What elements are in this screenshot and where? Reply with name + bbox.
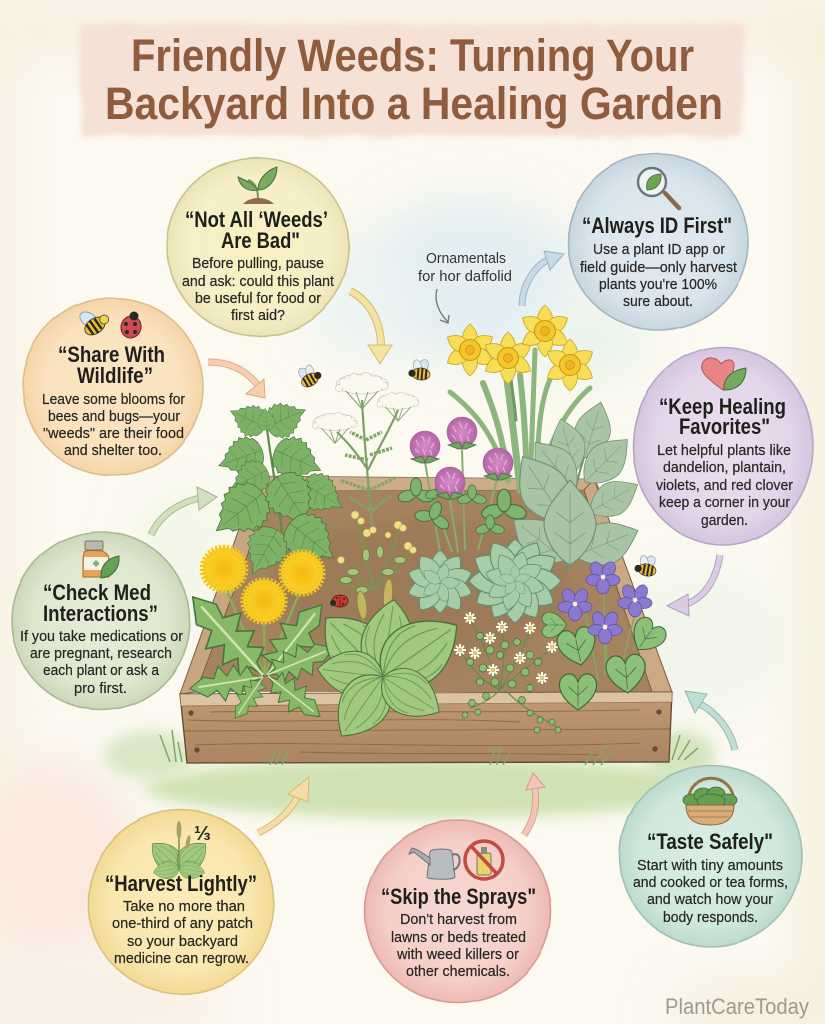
- panel: Check Med Interactions: pro first.: [74, 680, 127, 697]
- icon: plantain sprig: [144, 821, 214, 881]
- heading: “Taste Safely": [647, 829, 773, 854]
- panel: Taste Safely: and cooked or tea forms,: [633, 874, 788, 891]
- panel: Not All Weeds Are Bad: first aid?: [231, 307, 285, 324]
- panel: Check Med Interactions: Interactions”: [43, 601, 158, 626]
- panel: Not All Weeds Are Bad: be useful for food or: [195, 290, 321, 307]
- panel: Keep Healing Favorites: Favorites": [679, 414, 770, 439]
- watermark: PlantCareToday: [665, 994, 809, 1019]
- left rail: [180, 476, 272, 694]
- ornamentals annotation: Ornamentals: [426, 251, 506, 267]
- ladybug: [330, 595, 348, 607]
- daffodil flowers: [444, 324, 496, 376]
- title: [80, 24, 744, 136]
- panel: Skip the Sprays: lawns or beds treated: [391, 929, 526, 946]
- heading: “Check Med: [43, 580, 151, 605]
- panel: Always ID First: [568, 154, 748, 330]
- panel: Check Med Interactions: each plant or ask a: [43, 662, 160, 679]
- nettle plant: [200, 393, 352, 584]
- raised garden bed: [160, 476, 698, 765]
- arrow: pink to bed: [524, 773, 545, 835]
- body text: Take no more than: [123, 898, 245, 915]
- right rail: [584, 479, 672, 692]
- panel: Harvest Lightly: one-third of any patch: [112, 915, 253, 932]
- arrow: teal to bed: [685, 691, 735, 750]
- body text: Don't harvest from: [400, 911, 517, 928]
- panel: Keep Healing Favorites: violets, and red clover: [656, 477, 793, 494]
- front plank: [180, 692, 672, 763]
- icon: heart and leaf: [702, 358, 746, 390]
- sage plant: [502, 397, 646, 576]
- succulent large: [469, 537, 561, 623]
- soil: [186, 488, 660, 692]
- bee left: [294, 360, 324, 390]
- panel: Taste Safely: [620, 765, 802, 947]
- heading: “Always ID First": [582, 213, 732, 238]
- bee center: [408, 357, 431, 381]
- panel: Always ID First: field guide—only harvest: [580, 259, 738, 276]
- arrow: peach to bed: [208, 362, 265, 398]
- icon: seedling: [238, 167, 277, 204]
- arrow: yellow to bed: [350, 291, 392, 364]
- heading: “Keep Healing: [659, 394, 786, 419]
- body text: Leave some blooms for: [42, 391, 185, 408]
- red clover plant: [397, 417, 528, 552]
- heading: “Harvest Lightly”: [105, 871, 257, 896]
- body text: Start with tiny amounts: [637, 857, 783, 874]
- yarrow plant: [312, 372, 419, 525]
- panel: Check Med Interactions: are pregnant, research: [30, 645, 172, 662]
- title line 2: Backyard Into a Healing Garden: [105, 78, 723, 129]
- arrow: purple to violets: [667, 555, 720, 616]
- body text: If you take medications or: [20, 628, 183, 645]
- panel: Always ID First: plants you're 100%: [599, 276, 717, 293]
- icon: one third label: ⅓: [194, 823, 211, 845]
- succulent small: [406, 550, 474, 615]
- body text: Let helpful plants like: [657, 442, 791, 459]
- panel: Harvest Lightly: [88, 810, 274, 994]
- title banner wash: [80, 24, 744, 136]
- panel: Taste Safely: and watch how your: [647, 891, 773, 908]
- body text: Use a plant ID app or: [593, 241, 725, 258]
- panel: Always ID First: sure about.: [623, 293, 693, 310]
- panel: Share With Wildlife: "weeds" are their food: [43, 425, 184, 442]
- daffodil plant: [444, 305, 596, 490]
- grass wash under bed: [105, 731, 715, 818]
- panel: Keep Healing Favorites: garden.: [701, 512, 748, 529]
- title line 1: Friendly Weeds: Turning Your: [131, 30, 694, 81]
- panel: Taste Safely: body responds.: [663, 909, 758, 926]
- panel: Skip the Sprays: with weed killers or: [396, 946, 519, 963]
- panel: Share With Wildlife: bees and bugs—your: [48, 408, 180, 425]
- ornamentals annotation: for hor daffolid: [418, 269, 512, 285]
- icon: no spray: [465, 841, 503, 879]
- panel: Skip the Sprays: [365, 821, 551, 1003]
- panel: Skip the Sprays: other chemicals.: [406, 963, 510, 980]
- ornamentals annotation: [418, 251, 512, 285]
- arrow: green to bed: [151, 487, 217, 535]
- heading: “Skip the Sprays": [381, 884, 536, 909]
- panel: Check Med Interactions: [12, 532, 190, 710]
- bolts: [188, 709, 662, 753]
- daffodil leaves and stems: [450, 350, 590, 490]
- bee right: [634, 552, 659, 577]
- panel: Not All Weeds Are Bad: Are Bad": [221, 228, 300, 253]
- panel: Harvest Lightly: so your backyard: [127, 933, 238, 950]
- panel: Harvest Lightly: medicine can regrow.: [114, 950, 249, 967]
- grass tufts: [160, 730, 698, 765]
- icon: ladybug: [118, 312, 144, 340]
- plantain plant: [306, 579, 474, 750]
- panel: Keep Healing Favorites: dandelion, plantain,: [663, 459, 786, 476]
- heading: “Not All ‘Weeds’: [185, 207, 328, 232]
- chickweed plant: [454, 612, 561, 733]
- panel: Not All Weeds Are Bad: and ask: could this plant: [182, 273, 335, 290]
- icon: watering can: [409, 848, 460, 879]
- panel: Share With Wildlife: [23, 298, 203, 476]
- arrow: small grey pointer to daffodil: [436, 289, 449, 323]
- back rail: [258, 476, 600, 491]
- violet plant: [542, 560, 670, 710]
- arrow: orange to bed: [258, 777, 309, 833]
- panel: Keep Healing Favorites: [633, 347, 813, 545]
- icon: magnifying glass with leaf: [638, 168, 679, 208]
- icon: medicine bottle with leaf: [83, 541, 119, 578]
- icon: bee: [74, 300, 112, 339]
- panel: Keep Healing Favorites: keep a corner in your: [659, 494, 790, 511]
- body text: Before pulling, pause: [192, 255, 324, 272]
- arrow: blue to id circle: [522, 251, 564, 306]
- panel: Share With Wildlife: and shelter too.: [64, 442, 162, 459]
- dandelion plant: [174, 547, 340, 729]
- icon: basket of greens: [683, 778, 737, 825]
- yellow flowering weed: [337, 511, 416, 594]
- panel: Share With Wildlife: Wildlife”: [77, 363, 153, 388]
- panel: Not All Weeds Are Bad: [167, 158, 349, 336]
- heading: “Share With: [58, 342, 165, 367]
